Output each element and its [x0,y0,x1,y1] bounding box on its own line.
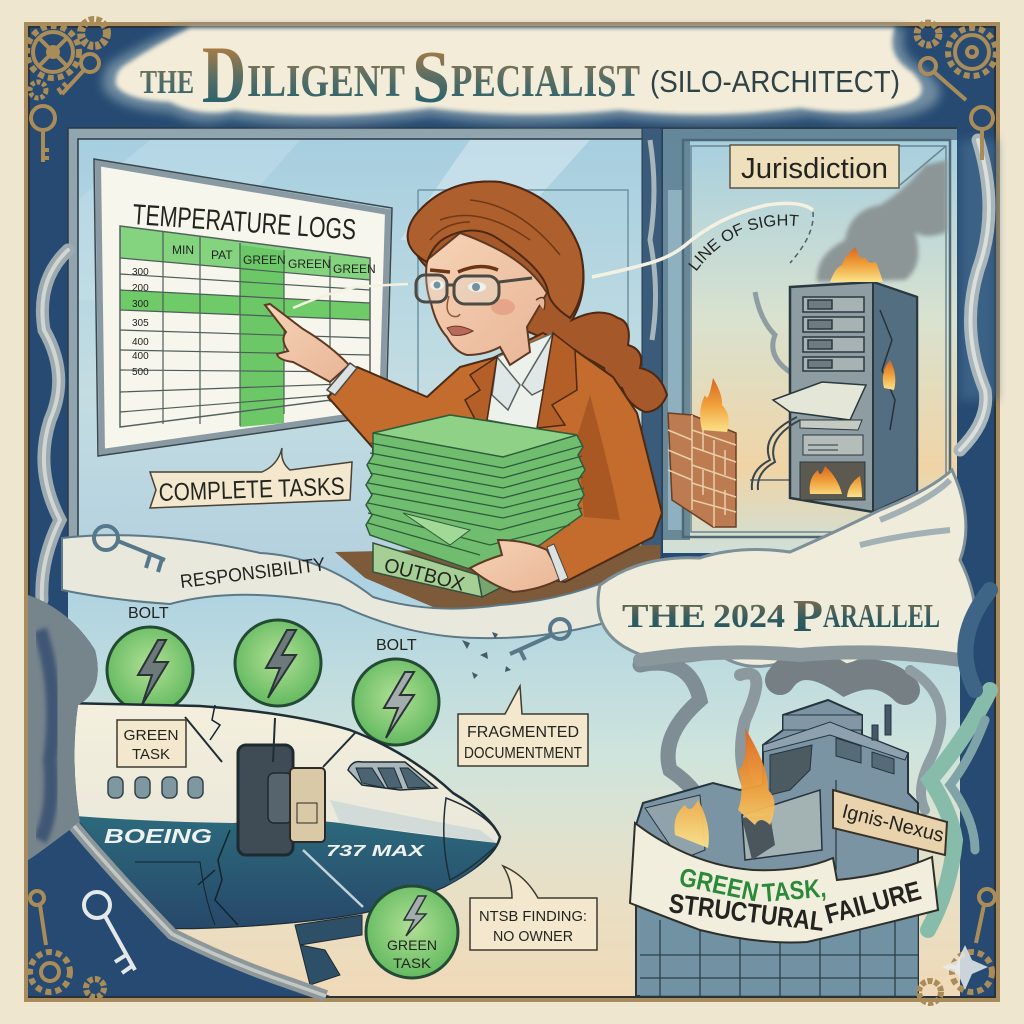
icon: corner gears and keys top right [917,23,996,160]
fuselage lower livery [62,815,497,928]
paper fragments [462,632,511,679]
shirt [487,333,553,430]
stack of green papers [366,415,585,572]
building flames [674,728,775,848]
banner black words: FAILURE [822,875,924,930]
title: S [412,37,450,119]
cabin windows [108,777,203,798]
line of sight beam [592,202,814,279]
server units [803,297,864,371]
woman specialist [265,182,667,582]
door opening [238,745,293,855]
label: ntsb finding: NTSB FINDING: [479,908,587,925]
table header and rows: 300 [132,267,149,278]
nose and mouth [447,296,460,317]
panel: temperature log office [68,128,662,570]
jacket shading [577,395,620,520]
label: bolt: BOLT [128,605,169,622]
eyes [430,280,486,292]
landing gear housing [295,915,362,985]
brick wall with flame [668,378,736,527]
paper jam [773,382,866,420]
label: jurisdiction [730,145,899,188]
watermark star [942,945,988,990]
icon: green task badge [366,886,458,978]
table header and rows: MIN [172,243,194,257]
outbox tray: OUTBOX [382,555,467,596]
table header and rows: 300 [132,299,149,310]
lapels [465,333,577,428]
hand on stack [470,540,568,592]
fuselage lettering [104,826,426,860]
burning building [636,700,918,996]
title: THE [140,64,194,101]
title [140,29,900,120]
sign: Ignis-Nexus [833,790,947,855]
smoke above server [817,160,947,282]
title: D [202,29,246,120]
banner black words: STRUCTURAL [667,888,826,937]
collar [492,333,553,410]
cable [752,417,800,490]
neck and face [426,233,547,365]
panel: lower sky background [68,560,960,996]
fuselage cracks [198,705,238,925]
fuselage lettering: 737 MAX [326,843,426,860]
brows [430,266,498,272]
windows bottom [640,900,918,996]
damaged openings [770,745,812,795]
bolt icons [107,605,439,745]
desk [335,545,660,612]
upper tier [636,700,918,996]
label: responsibility: RESPONSIBILITY [179,554,327,593]
whiteboard heading: TEMPERATURE LOGS [132,199,357,247]
banner green words: TASK, [761,873,827,908]
label: ntsb finding: NO OWNER [493,928,573,945]
hand: pointing [265,304,349,382]
banner: green task, structural failure [630,823,938,942]
panel: jurisdiction room [660,128,957,553]
table header and rows: 500 [132,367,149,378]
rooftop pipes [872,705,891,740]
icon: loose key [510,619,570,660]
windows tier [836,738,894,774]
label: ntsb finding [470,866,597,950]
title: PECIALIST [451,55,640,106]
label: complete tasks [150,448,352,508]
heading: the 2024 parallel: ARALLEL [823,598,940,635]
table header and rows: 400 [132,351,149,362]
smoke: the 2024 parallel [598,470,975,670]
hair back and ponytail [412,182,667,412]
jacket [328,333,662,582]
blush [491,299,515,315]
icon: green task badge: TASK [393,955,432,971]
label: fragmented documentment: DOCUMENTMENT [464,745,582,762]
label: fragmented documentment [458,686,588,766]
pointer beam [293,284,408,308]
label: complete tasks: COMPLETE TASKS [158,473,345,507]
smoke plumes above building [640,652,960,815]
title: ILIGENT [247,55,405,106]
earring and ear [536,298,545,310]
cockpit windows [348,762,437,790]
heading: the 2024 parallel: P [793,590,823,641]
icon: bolt 1 [107,627,193,713]
title: (SILO-ARCHITECT) [650,64,900,99]
nose cone [444,798,500,880]
outbox tray [373,543,510,597]
table header and rows: GREEN [288,257,331,271]
table header and rows [120,226,376,427]
smoke wisp near rack [755,292,800,378]
cuff [327,363,357,395]
server rack on fire [752,247,917,512]
icon: corner gears bottom left [30,891,104,997]
smoke: right side green swirl [928,590,990,930]
smoke band: responsibility [62,535,640,638]
smoke ribbons along the edges [42,140,989,600]
fuselage lettering: BOEING [104,826,212,848]
icon: bolt 3 [353,659,439,745]
banner green words: GREEN [677,862,761,908]
table header and rows: GREEN [333,262,376,276]
icon: bolt 2 [235,620,321,706]
label: green task: TASK [132,746,170,763]
flames on rack [810,466,862,497]
icon: corner gears bottom right [919,889,995,1003]
label: green task [117,720,186,767]
smoke: lower left corner [28,595,330,996]
icon: corner gears and keys top left [27,20,107,162]
heading: the 2024 parallel [622,590,940,641]
label: bolt 3: BOLT [376,637,417,654]
icon: key with responsibility [94,526,165,572]
table header and rows: 400 [132,337,149,348]
icon: key bottom left [84,892,135,973]
fuselage [62,703,500,928]
table header and rows: PAT [211,248,233,262]
whiteboard: temperature logs [94,159,392,456]
line of sight beam: LINE OF SIGHT [688,214,799,271]
airplane: Boeing 737 MAX [62,703,500,985]
banner green words [677,862,827,908]
title banner background [103,28,940,125]
icon: green task badge: GREEN [387,937,437,953]
heading: the 2024 parallel: 2024 [713,598,785,635]
sign: Ignis-Nexus: Ignis-Nexus [840,801,946,847]
connector lines [185,717,355,767]
label: green task: GREEN [124,727,178,744]
door plug [290,768,325,842]
hair front [408,182,583,318]
table header and rows: 305 [132,318,149,329]
table header and rows: GREEN [243,253,286,267]
label: fragmented documentment: FRAGMENTED [467,724,579,741]
banner black words [667,875,924,937]
heading: the 2024 parallel: THE [622,598,706,635]
label: jurisdiction: Jurisdiction [741,153,888,185]
table header and rows: 200 [132,283,149,294]
glasses [416,275,532,304]
